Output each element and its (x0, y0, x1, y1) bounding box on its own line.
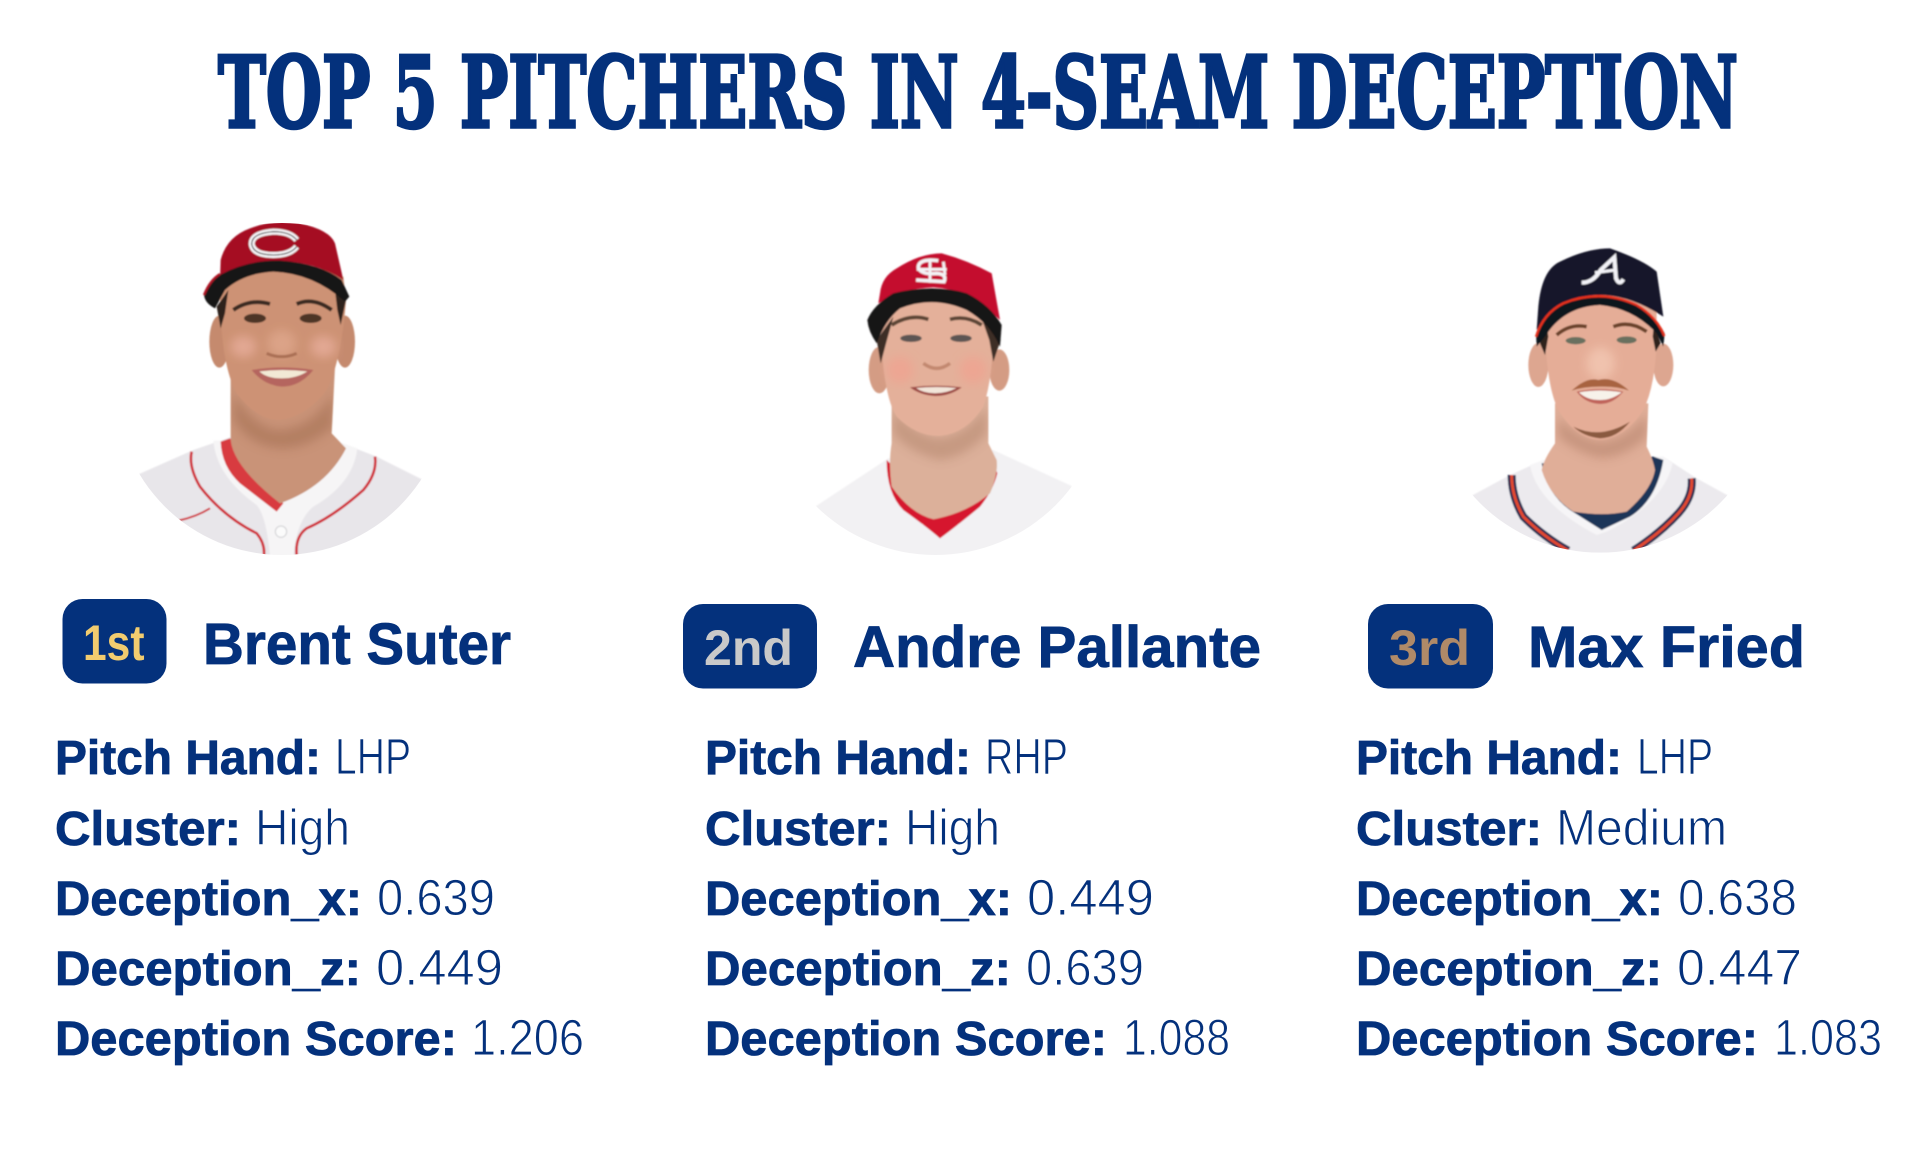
portrait: Max Fried (1470, 248, 1730, 553)
stat: cluster (1356, 799, 1727, 856)
stat: cluster: Cluster: (705, 803, 891, 856)
column: Andre Pallante (683, 604, 1261, 1066)
player name: Andre Pallante (853, 615, 1261, 680)
column: Max Fried (1356, 604, 1882, 1066)
stat: cluster (55, 799, 350, 856)
rank badge: 3rd (1368, 604, 1493, 688)
stat: deception z: 0.447 (1677, 939, 1802, 996)
stat: deception score: 1.083 (1774, 1009, 1882, 1066)
stat: deception z: 0.449 (376, 939, 503, 996)
stat: deception x: Deception_x: (1356, 873, 1663, 926)
stat: deception z (705, 939, 1144, 996)
rank badge: 1st (62, 599, 166, 684)
rank badge: 3rd: 3rd (1389, 620, 1470, 676)
stat: pitch hand (55, 728, 411, 785)
stat: deception z: Deception_z: (55, 943, 361, 996)
stat: deception x (55, 869, 495, 926)
stat: deception score: 1.088 (1123, 1009, 1230, 1066)
stat: pitch hand: RHP (985, 728, 1068, 785)
stat: deception z: Deception_z: (705, 943, 1011, 996)
stat: cluster: Cluster: (55, 803, 241, 856)
stat: pitch hand (705, 728, 1068, 785)
stat: deception x: 0.638 (1678, 869, 1797, 926)
rank badge: 2nd: 2nd (704, 620, 793, 676)
stat: deception score: 1.206 (471, 1009, 584, 1066)
stat: deception z (55, 939, 503, 996)
stat: deception score: Deception Score: (55, 1013, 457, 1066)
stat: deception z: Deception_z: (1356, 943, 1662, 996)
stat: deception x: Deception_x: (705, 873, 1012, 926)
column: Brent Suter (55, 599, 584, 1066)
rank badge: 2nd (683, 604, 817, 688)
stat: cluster: Cluster: (1356, 803, 1542, 856)
portrait: Brent Suter (133, 222, 430, 557)
stat: pitch hand: Pitch Hand: (55, 732, 321, 785)
stat: cluster: High (255, 799, 350, 856)
player name: Brent Suter (203, 612, 511, 677)
portrait: Andre Pallante (810, 253, 1072, 557)
stat: deception score: Deception Score: (1356, 1013, 1758, 1066)
stat: deception z (1356, 939, 1802, 996)
stat: pitch hand: Pitch Hand: (705, 732, 971, 785)
rank badge: 1st: 1st (83, 615, 145, 671)
player name: Max Fried (1528, 615, 1805, 680)
stat: deception score (55, 1009, 584, 1066)
stat: cluster: Medium (1556, 799, 1727, 856)
stat: pitch hand: LHP (1637, 728, 1713, 785)
stat: deception x: 0.449 (1027, 869, 1154, 926)
stat: pitch hand (1356, 728, 1713, 785)
stat: deception x: Deception_x: (55, 873, 362, 926)
stat: pitch hand: Pitch Hand: (1356, 732, 1622, 785)
stat: deception x: 0.639 (377, 869, 495, 926)
stat: deception score: Deception Score: (705, 1013, 1107, 1066)
stat: pitch hand: LHP (335, 728, 411, 785)
stat: cluster (705, 799, 1000, 856)
stat: deception x (705, 869, 1154, 926)
stat: deception score (1356, 1009, 1882, 1066)
stat: deception score (705, 1009, 1230, 1066)
stat: deception x (1356, 869, 1797, 926)
stat: cluster: High (905, 799, 1000, 856)
stat: deception z: 0.639 (1026, 939, 1144, 996)
